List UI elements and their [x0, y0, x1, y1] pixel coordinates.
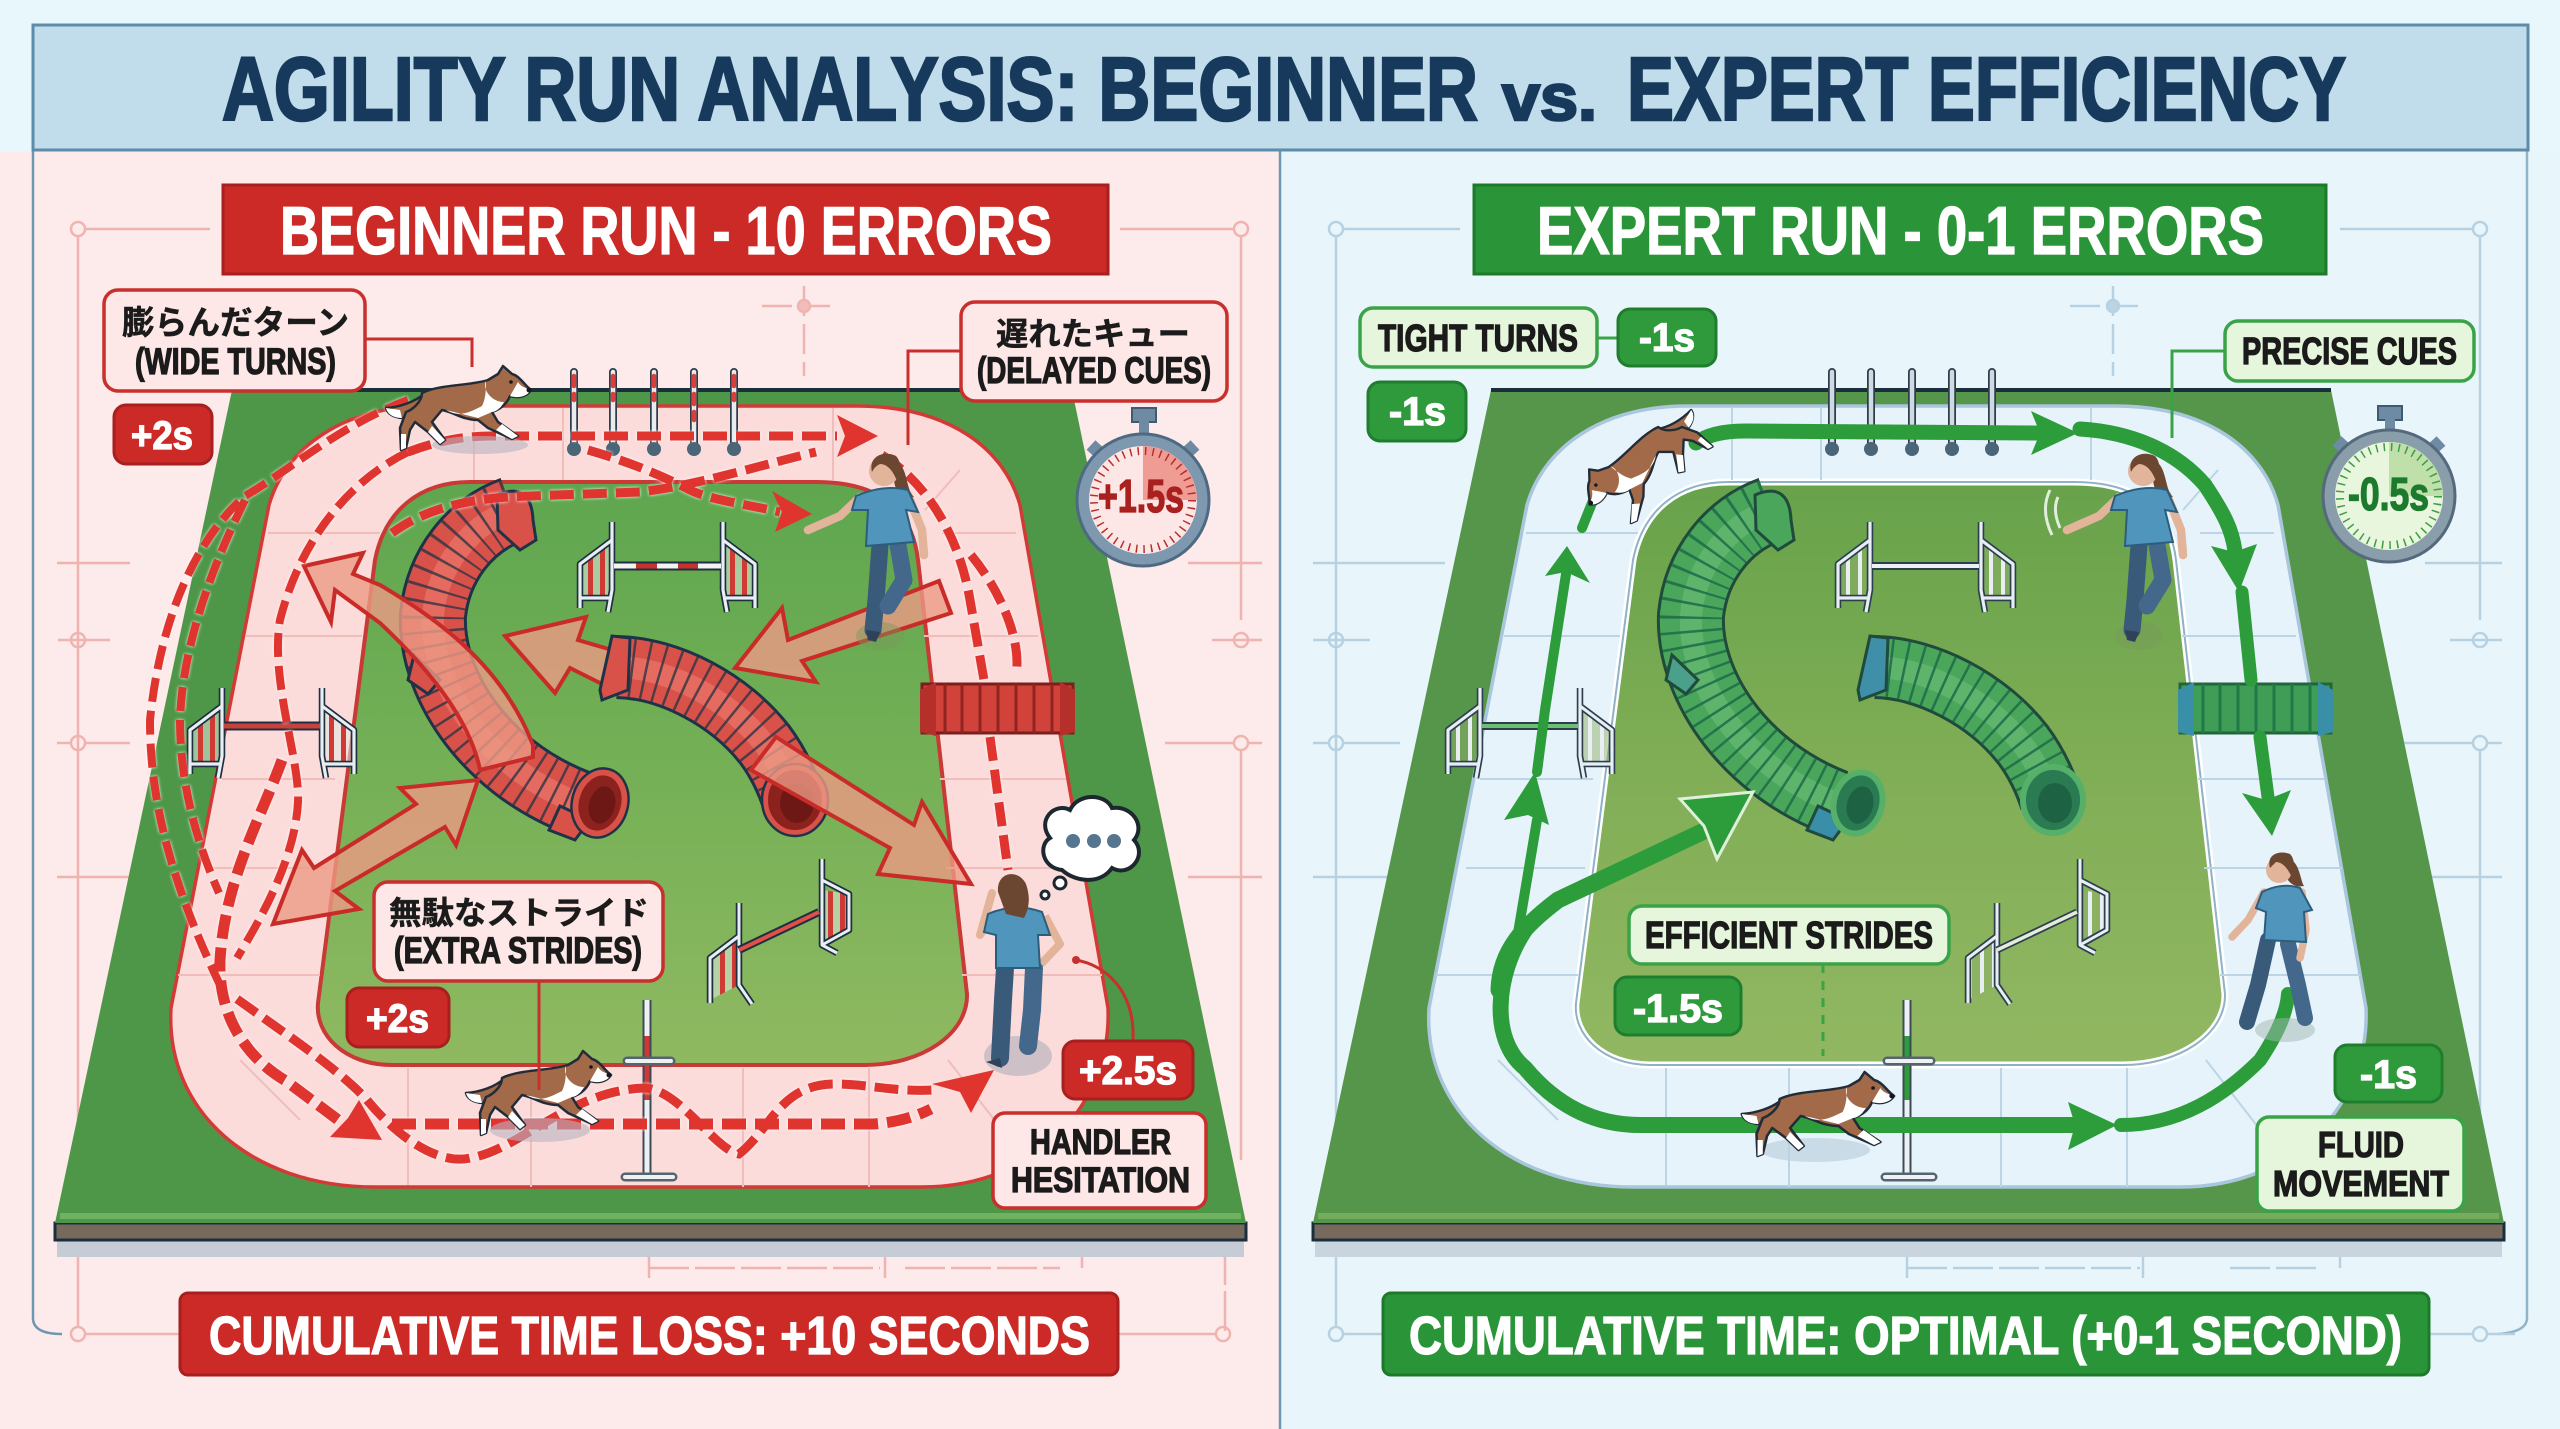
- badge: +2.5s: +2.5s: [1079, 1049, 1177, 1093]
- title text: AGILITY RUN ANALYSIS: BEGINNER: [222, 40, 1478, 140]
- summary bar: optimal time: CUMULATIVE TIME: OPTIMAL (+0-1 SECOND): [1409, 1306, 2402, 1366]
- jump: top expert: [1838, 522, 2013, 612]
- badge: +2s strides: +2s: [366, 997, 429, 1041]
- panel background: beginner: [0, 152, 1280, 1429]
- heading: expert: EXPERT RUN - 0-1 ERRORS: [1537, 193, 2264, 269]
- badge: -1s tight turns: -1s: [1639, 316, 1695, 360]
- weave poles: beginner: [574, 372, 734, 449]
- big arrow: to handler: [751, 737, 971, 884]
- green route arrows: [1499, 411, 2291, 1150]
- handler: hesitating with thought bubble: [980, 797, 1139, 1076]
- tunnel: short: [600, 636, 828, 836]
- badge: +2s strides: [347, 988, 449, 1047]
- stopwatch: +1.5s: [1077, 408, 1209, 566]
- dashed error paths: [150, 400, 1017, 1159]
- badge: +2s: +2s: [131, 414, 193, 458]
- icon: thought bubble: [1041, 797, 1139, 899]
- callout: wide turns: (WIDE TURNS): [135, 341, 336, 382]
- callout: delayed cues: 遅れたキュー: [996, 316, 1190, 352]
- summary bar: time loss: [180, 1293, 1118, 1375]
- callout: precise cues: PRECISE CUES: [2242, 331, 2457, 373]
- badge: -1s fluid: [2335, 1045, 2442, 1102]
- callout: efficient strides: EFFICIENT STRIDES: [1645, 915, 1933, 957]
- summary bar: time loss: CUMULATIVE TIME LOSS: +10 SECONDS: [209, 1306, 1090, 1366]
- course field: expert: [1313, 390, 2504, 1257]
- weave poles: expert: [1832, 372, 1992, 449]
- handler: cueing: [2067, 454, 2183, 650]
- big arrow: from handler: [735, 581, 951, 682]
- title text: EXPERT EFFICIENCY: [1627, 40, 2346, 140]
- heading: beginner: BEGINNER RUN - 10 ERRORS: [280, 193, 1052, 269]
- dog: leaping: [1572, 384, 1722, 541]
- badge: -1s fluid: -1s: [2360, 1053, 2417, 1097]
- tunnel: short expert: [1858, 636, 2083, 833]
- stopwatch: +1.5s: +1.5s: [1098, 470, 1184, 522]
- track: beginner: [171, 406, 1108, 1187]
- handler: pointing: [808, 454, 924, 650]
- badge: +2.5s: [1063, 956, 1193, 1099]
- jump: diagonal: [710, 859, 849, 1004]
- background: top band: [0, 0, 2560, 152]
- badge: -1.5s: [1615, 977, 1741, 1035]
- jump: single bar on track: [625, 1000, 673, 1177]
- callout: efficient strides: [1629, 906, 1949, 1056]
- panel: beginner run: [55, 185, 1246, 1375]
- callout: extra strides: (EXTRA STRIDES): [394, 930, 642, 971]
- tunnel: long: [408, 491, 636, 844]
- callout: tight turns: [1360, 308, 1618, 367]
- callout: handler hesitation: [993, 1113, 1206, 1208]
- jump: top: [580, 522, 755, 612]
- badge: -1s: -1s: [1389, 390, 1446, 434]
- callout: extra strides: 無駄なストライド: [389, 895, 649, 931]
- summary bar: optimal time: [1383, 1293, 2429, 1375]
- jump: left expert: [1448, 688, 1612, 778]
- tunnel: long expert: [1666, 491, 1889, 840]
- callout: fluid movement: [2257, 1117, 2464, 1211]
- big arrow: double headed: [273, 780, 478, 924]
- dog: bottom: [466, 1051, 612, 1142]
- dog: top: [386, 366, 532, 454]
- stopwatch: -0.5s: [2323, 406, 2455, 562]
- jump: left on track: [190, 688, 354, 778]
- title banner: [33, 25, 2528, 150]
- callout: fluid movement: FLUID: [2318, 1124, 2404, 1165]
- dog: running: [1742, 1072, 1895, 1162]
- handler: walking: [2232, 853, 2315, 1042]
- badge: +2s: [114, 405, 212, 464]
- callout: handler hesitation: HESITATION: [1011, 1161, 1190, 1200]
- course field: beginner: [55, 390, 1246, 1257]
- jump: single bar expert: [1885, 1000, 1933, 1177]
- panel background: expert: [1280, 152, 2560, 1429]
- track: expert: [1429, 406, 2366, 1187]
- panel: expert run: [1313, 185, 2504, 1375]
- jump: diagonal expert: [1968, 859, 2107, 1004]
- callout: delayed cues: (DELAYED CUES): [977, 350, 1211, 391]
- tunnel: barrel: [920, 682, 1075, 736]
- stopwatch: -0.5s: -0.5s: [2348, 468, 2429, 520]
- big arrow: tunnel to tunnel: [505, 617, 612, 693]
- callout: delayed cues: [908, 302, 1227, 445]
- callout: handler hesitation: HANDLER: [1030, 1123, 1171, 1162]
- callout: fluid movement: MOVEMENT: [2273, 1163, 2449, 1204]
- badge: -1s tight turns: [1618, 309, 1716, 366]
- tunnel: barrel expert: [2178, 682, 2333, 736]
- callout: tight turns: TIGHT TURNS: [1378, 318, 1578, 360]
- callout: wide turns: [104, 290, 472, 391]
- callout: wide turns: 膨らんだターン: [122, 304, 349, 341]
- title text: vs.: [1502, 60, 1597, 134]
- badge: -1s: [1368, 382, 1466, 441]
- big arrow: up-left: [304, 553, 533, 770]
- callout: extra strides: [374, 882, 663, 1090]
- callout: precise cues: [2172, 321, 2474, 438]
- icon: cue waves: [2045, 490, 2060, 535]
- badge: -1.5s: -1.5s: [1633, 987, 1723, 1031]
